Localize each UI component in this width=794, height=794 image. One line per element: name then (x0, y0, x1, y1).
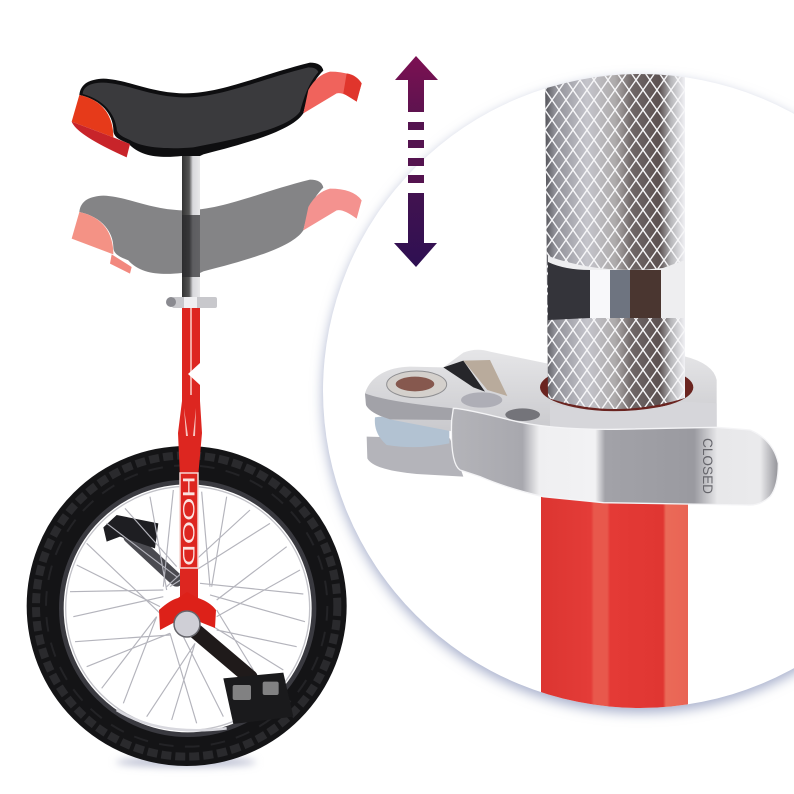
clamp lever (451, 402, 778, 505)
bolt (375, 416, 449, 447)
rim (61, 482, 314, 735)
lower plate (367, 437, 463, 477)
holes (461, 392, 502, 408)
upper plate (365, 350, 717, 432)
quick release screw (387, 371, 447, 398)
unicycle (36, 63, 362, 767)
clamp body (365, 350, 717, 477)
clamp text: CLOSED (700, 438, 716, 494)
detail circle (323, 70, 794, 720)
tyre (44, 463, 329, 749)
seat right bumper (303, 72, 362, 113)
rim highlight (117, 710, 227, 730)
height adjustment arrow (394, 56, 438, 267)
wheel (36, 455, 337, 757)
arrow down (394, 193, 437, 267)
post socket (540, 376, 694, 412)
frame (159, 308, 216, 630)
post neck band (548, 256, 685, 320)
far pedal (103, 515, 158, 548)
ground shadow (116, 757, 256, 767)
circle shadow (323, 79, 794, 713)
arrow up (395, 56, 438, 112)
seat post (182, 147, 200, 297)
red tube (541, 496, 688, 708)
small clamp (166, 297, 217, 308)
fork crown (159, 592, 216, 630)
tread (36, 455, 337, 757)
ghost seat (72, 180, 362, 274)
far crank (130, 537, 177, 580)
near pedal (223, 673, 293, 724)
frame tube (178, 308, 202, 598)
hub (174, 611, 200, 637)
fork decal (179, 473, 198, 568)
spokes (70, 490, 305, 723)
seat (72, 63, 362, 157)
fork decal: HOOD (179, 476, 198, 566)
plate edge (365, 393, 453, 420)
seat post detail (545, 70, 685, 409)
cam dark (443, 361, 485, 392)
near crank (188, 625, 250, 677)
dashes (408, 122, 424, 183)
cam light (463, 360, 507, 396)
seat left bumper (72, 95, 113, 137)
frame decal (188, 363, 200, 385)
